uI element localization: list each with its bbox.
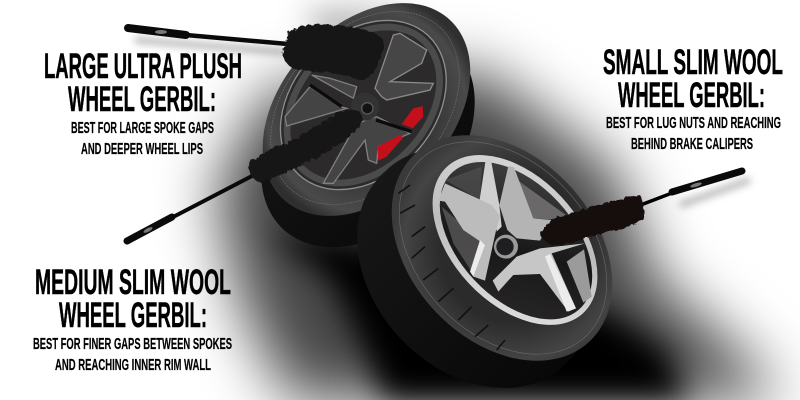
heading: wheel gerbil: WHEEL GERBIL: — [59, 296, 207, 335]
front wheel: silver five-spoke rim — [357, 101, 648, 395]
description: finer gaps: BEST FOR FINER GAPS BETWEEN SPOKES — [33, 336, 232, 353]
front tire — [357, 101, 648, 395]
description: deeper wheel lips: AND DEEPER WHEEL LIPS — [81, 141, 203, 158]
silver spokes — [479, 158, 502, 232]
description: large spoke gaps: BEST FOR LARGE SPOKE GAPS — [71, 120, 214, 137]
label: small slim wool wheel gerbil — [603, 43, 783, 153]
large ultra plush brush — [128, 24, 383, 81]
back rim — [247, 0, 480, 223]
front rim — [400, 124, 630, 356]
back tire — [233, 0, 497, 247]
small slim wool brush — [540, 171, 750, 245]
back wheel: dark rim with red caliper — [233, 0, 497, 247]
description: inner rim wall: AND REACHING INNER RIM WALL — [55, 357, 211, 374]
window panels — [567, 249, 592, 303]
medium slim wool brush — [127, 110, 362, 241]
heading: large ultra plush: LARGE ULTRA PLUSH — [44, 47, 242, 86]
heading: medium slim wool: MEDIUM SLIM WOOL — [35, 263, 231, 302]
label: medium slim wool wheel gerbil — [33, 263, 232, 374]
red brake caliper — [377, 106, 423, 161]
label: large ultra plush wheel gerbil — [44, 47, 242, 158]
heading: wheel gerbil: WHEEL GERBIL: — [68, 80, 216, 119]
